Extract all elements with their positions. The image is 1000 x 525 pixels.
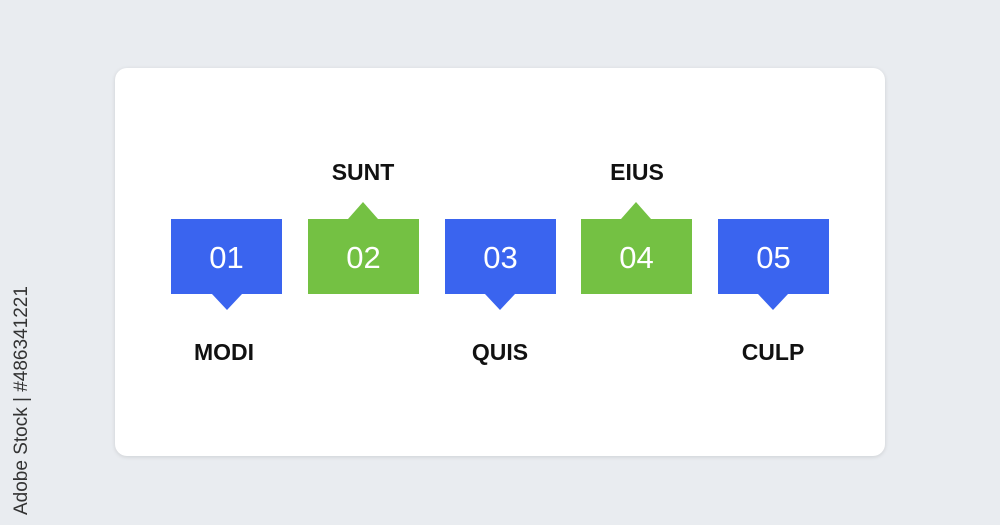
- label SUNT: SUNT: [332, 159, 394, 185]
- step 03: [445, 219, 556, 294]
- label QUIS: QUIS: [472, 339, 528, 365]
- card panel: [115, 68, 885, 456]
- step 04: 04: [619, 240, 654, 275]
- step 02: [308, 219, 419, 294]
- step 01: [171, 219, 282, 294]
- label CULP: CULP: [742, 339, 804, 365]
- step 05: [718, 219, 829, 294]
- watermark id: Adobe Stock | #486341221: [11, 286, 32, 515]
- step 01: 01: [209, 240, 244, 275]
- label MODI: MODI: [194, 339, 254, 365]
- label EIUS: EIUS: [610, 159, 664, 185]
- step 03: 03: [483, 240, 518, 275]
- step 02: 02: [346, 240, 381, 275]
- step 05: 05: [756, 240, 791, 275]
- step 04: [581, 219, 692, 294]
